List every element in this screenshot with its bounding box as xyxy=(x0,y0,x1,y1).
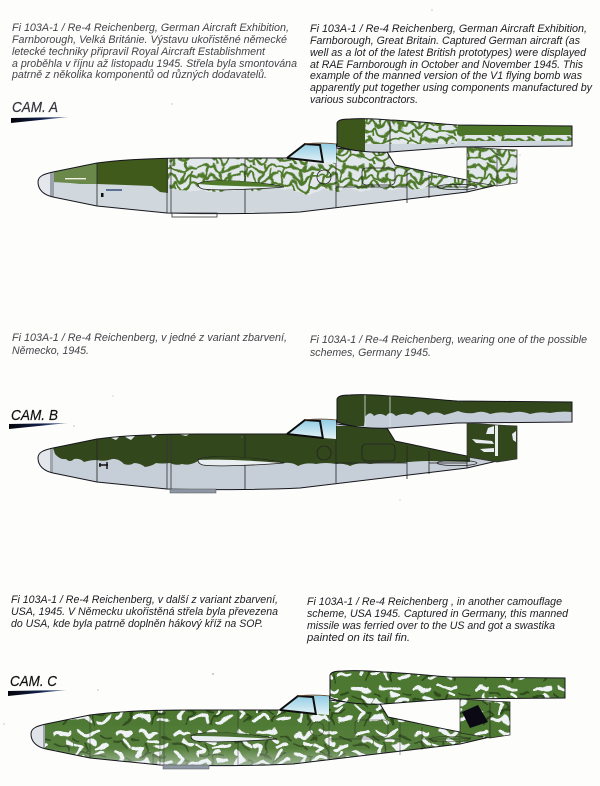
aircraft: CAM C side profile xyxy=(30,670,566,770)
text: CAM A English caption: well as a lot of the latest British prototypes) were displayed xyxy=(310,47,587,59)
text: CAM A English caption: apparently put together using components manufactured by xyxy=(310,82,593,94)
text: CAM A Czech caption: patrně z několika komponentů od různých dodavatelů. xyxy=(11,69,267,81)
tail fin C xyxy=(460,699,510,738)
text: CAM B English caption: schemes, Germany 1945. xyxy=(310,347,431,359)
text: CAM A English caption: example of the manned version of the V1 flying bomb was xyxy=(310,70,583,82)
icon: blacked-out swastika square on tail fin xyxy=(462,705,488,728)
heading: CAM. C xyxy=(8,673,67,696)
text: CAM A Czech caption: letecké techniky připravil Royal Aircraft Establishment xyxy=(12,46,266,58)
engine B xyxy=(337,391,572,429)
fuselage B xyxy=(38,419,497,493)
text: CAM C English caption: Fi 103A-1 / Re-4 Reichenberg , in another camouflage xyxy=(307,596,562,608)
heading: CAM. B: CAM. B xyxy=(11,407,58,424)
text: CAM C English caption: scheme, USA 1945. Captured in Germany, this manned xyxy=(307,608,569,620)
tail fin B xyxy=(467,423,517,462)
text: CAM A English caption: Farnborough, Great Britain. Captured German aircraft (as xyxy=(310,35,581,47)
heading: CAM. B xyxy=(9,407,68,429)
text: CAM B Czech caption: Fi 103A-1 / Re-4 Reichenberg, v jedné z variant zbarvení, xyxy=(12,332,287,344)
engine C xyxy=(330,670,566,705)
text: CAM C Czech caption: do USA, kde byla patrně doplněn hákový kříž na SOP. xyxy=(11,618,263,630)
text: CAM B Czech caption xyxy=(12,332,287,357)
text: CAM C English caption: missile was ferried over to the US and got a swastika xyxy=(307,620,555,632)
fuselage C xyxy=(30,694,488,770)
scan speckles xyxy=(3,9,521,725)
text: CAM A English caption xyxy=(310,23,593,106)
text: CAM A Czech caption: Fi 103A-1 / Re-4 Reichenberg, German Aircraft Exhibition, xyxy=(12,22,289,34)
tail fin A xyxy=(466,146,518,186)
text: CAM C Czech caption xyxy=(11,594,278,630)
aircraft: CAM A side profile xyxy=(38,110,572,217)
fuselage A xyxy=(38,140,525,217)
aircraft: CAM B side profile xyxy=(38,391,572,493)
text: CAM A Czech caption: Farnborough, Velká Británie. Výstavu ukořistěné německé xyxy=(12,34,287,46)
text: CAM A Czech caption xyxy=(11,22,297,81)
text: CAM B English caption xyxy=(310,334,587,359)
heading: CAM. A: CAM. A xyxy=(12,99,58,116)
text: CAM A English caption: Fi 103A-1 / Re-4 Reichenberg, German Aircraft Exhibition, xyxy=(310,23,587,35)
text: CAM C Czech caption: Fi 103A-1 / Re-4 Reichenberg, v další z variant zbarvení, xyxy=(11,594,278,606)
text: CAM A Czech caption: a proběhla v říjnu až listopadu 1945. Střela byla smontována xyxy=(12,58,297,70)
heading: CAM. C: CAM. C xyxy=(10,673,57,690)
text: CAM B English caption: Fi 103A-1 / Re-4 Reichenberg, wearing one of the possible xyxy=(310,334,587,346)
text: CAM C English caption xyxy=(306,596,569,644)
text: CAM A English caption: at RAE Farnborough in October and November 1945. This xyxy=(310,59,584,71)
text: CAM B Czech caption: Německo, 1945. xyxy=(12,345,89,357)
heading: CAM. A xyxy=(11,99,69,123)
text: CAM C Czech caption: USA, 1945. V Německu ukořistěná střela byla převezena xyxy=(11,606,278,618)
text: CAM A English caption: various subcontractors. xyxy=(310,94,418,106)
engine A xyxy=(336,118,572,153)
text: CAM C English caption: painted on its tail fin. xyxy=(306,632,410,644)
